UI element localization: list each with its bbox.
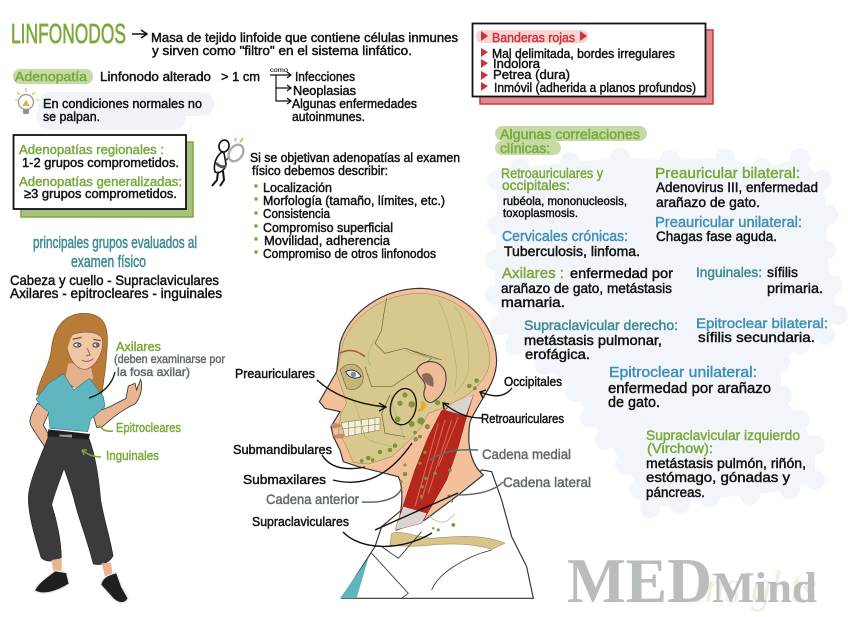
woman's labels: axillary: [89, 339, 225, 398]
red flags list: Mal delimitada, bordes irregulares: [492, 46, 675, 61]
text: bilateral epitrochlear: sífilis secundaria.: [698, 329, 815, 345]
eyes, nose and mouth: [73, 337, 101, 341]
front hair: [63, 320, 106, 357]
skin head and neck: [319, 288, 497, 530]
teal shirt strip: [340, 558, 368, 598]
head labels and pointers: [233, 366, 591, 546]
belt: [47, 429, 90, 442]
causes list: Infecciones: [295, 69, 355, 84]
heading: main groups: examen físico: [71, 252, 146, 271]
generalized heading and text: [19, 174, 182, 201]
checklist: exam items: Morfología (tamaño, límites, etc.): [263, 193, 445, 208]
text: unilateral epitrochlear: de gato.: [608, 394, 660, 411]
text: axillary: [501, 265, 673, 310]
sternocleidomastoid muscle: [395, 395, 473, 530]
definition text: [151, 30, 459, 58]
text: unilateral epitrochlear: Epitroclear unilateral:: [609, 364, 757, 381]
watermark logo: MED: [567, 546, 712, 616]
checklist: exam items: Consistencia: [263, 206, 331, 221]
text: inguinal: primaria.: [767, 280, 823, 296]
watermark logo: [567, 546, 817, 616]
panel: clinical correlations background: [485, 148, 848, 518]
causes list: Neoplasias: [293, 83, 356, 98]
intro: exam description: [250, 150, 460, 178]
woman's labels: axillary: la fosa axilar): [117, 365, 190, 379]
eye socket and eye: [340, 364, 363, 390]
preauricular label: Preauriculares: [235, 366, 315, 381]
text: axillary: mamaria.: [501, 294, 565, 310]
illustration: woman: [28, 313, 142, 603]
woman's labels: inguinal: [82, 448, 159, 463]
text: axillary: arañazo de gato, metástasis: [501, 280, 672, 296]
red flags list: Indolora: [493, 56, 541, 71]
causes list: autoinmunes.: [292, 109, 365, 124]
checklist: exam items: Localización: [263, 180, 332, 195]
regional heading and text: Adenopatías regionales :: [19, 142, 164, 157]
text: left supraclavicular: estómago, gónadas y: [646, 469, 790, 485]
submaxillary label: Submaxilares: [243, 472, 327, 487]
adenopatia definition: > 1 cm: [221, 69, 260, 84]
woman's labels: axillary: Axilares: [116, 339, 161, 354]
groups text: Cabeza y cuello - Supraclaviculares: [10, 272, 219, 288]
medial chain label: Cadena medial: [482, 446, 571, 462]
causes list: Algunas enfermedades: [292, 96, 417, 111]
ear: [417, 362, 446, 402]
arms: [30, 403, 52, 447]
submandibular label: Submandibulares: [233, 442, 332, 457]
watermark logo: Mind: [712, 565, 817, 612]
hair back: [37, 313, 107, 395]
text: chronic cervical: [502, 228, 640, 259]
text: left supraclavicular: [646, 427, 806, 500]
woman's labels: inguinal: Inguinales: [106, 448, 159, 463]
text: inguinal: Inguinales:: [696, 264, 762, 280]
neck and face: [65, 363, 93, 390]
regional heading and text: 1-2 grupos comprometidos.: [22, 155, 179, 170]
illustration: head and neck anatomy: [319, 288, 533, 598]
checklist: exam items: Movilidad, adherencia: [264, 233, 391, 248]
callout: normal conditions: se palpan.: [43, 109, 100, 124]
lymph nodes: [360, 379, 479, 531]
text: bilateral epitrochlear: [696, 315, 828, 345]
woman's labels: axillary: (deben examinarse por: [114, 352, 225, 366]
panel: red flags: [472, 24, 713, 104]
text: axillary: Axilares :: [502, 265, 564, 282]
intro: exam description: físico debemos describir:: [252, 163, 388, 178]
skull: [337, 293, 490, 464]
pointer lines: [317, 380, 512, 546]
shirt and shoulder: [342, 470, 533, 598]
text: unilateral epitrochlear: enfermedad por arañazo: [608, 380, 771, 397]
text: retroauricular and occipital: [501, 165, 627, 220]
woman's labels: epitrochlear: Epitrocleares: [116, 420, 181, 435]
checklist: exam items: [254, 180, 445, 261]
icon: figure with magnifying glass: [212, 138, 246, 186]
generalized heading and text: ≥3 grupos comprometidos.: [24, 186, 177, 201]
text: retroauricular and occipital: occipitales:: [502, 177, 570, 193]
heading: main groups: [33, 233, 197, 271]
regional heading and text: [19, 142, 179, 170]
adenopatia definition: [100, 69, 260, 84]
text: unilateral preauricular: Chagas fase aguda.: [656, 228, 777, 244]
text: right supraclavicular: metástasis pulmonar,: [524, 332, 662, 348]
definition text: Masa de tejido linfoide que contiene células inmunes: [151, 30, 459, 45]
adenopatia definition: Linfonodo alterado: [100, 69, 211, 84]
text: bilateral epitrochlear: Epitroclear bilateral:: [696, 315, 828, 331]
red flags list: [481, 46, 696, 95]
text: left supraclavicular: páncreas.: [646, 484, 705, 500]
text: inguinal: [696, 264, 823, 296]
generalized heading and text: Adenopatías generalizadas:: [19, 174, 182, 189]
occipital label: Occipitales: [504, 374, 562, 389]
ankles and shoes: [52, 558, 113, 577]
text: right supraclavicular: erofágica.: [525, 346, 590, 362]
clavicle: [390, 532, 505, 549]
arrow: title to definition: [132, 30, 147, 38]
heading: clinical correlations: Algunas correlaciones: [500, 126, 640, 142]
adenopatia label: Adenopatía: [15, 69, 88, 84]
text: axillary: enfermedad por: [570, 265, 673, 281]
text: right supraclavicular: Supraclavicular derecho:: [524, 317, 678, 333]
text: bilateral preauricular: Preauricular bilateral:: [655, 165, 800, 182]
lips and teeth: [331, 423, 345, 438]
text: bilateral preauricular: [655, 165, 818, 210]
text: retroauricular and occipital: Retroauriculares y: [501, 165, 603, 181]
checklist: exam items: Compromiso de otros linfonodos: [263, 246, 436, 261]
earring: [418, 402, 425, 411]
branching arrows: causes: como: [270, 68, 289, 74]
groups text: Axilares - epitrocleares - inguinales: [10, 285, 222, 301]
text: unilateral preauricular: [655, 214, 802, 244]
red flags heading: Banderas rojas: [492, 30, 575, 45]
watermark logo: Insights: [691, 561, 817, 612]
anterior chain label: Cadena anterior: [266, 491, 359, 507]
text: unilateral epitrochlear: [608, 364, 771, 411]
text: chronic cervical: Tuberculosis, linfoma.: [504, 243, 640, 259]
groups text: [10, 272, 222, 301]
heading: clinical correlations: [495, 126, 647, 156]
lateral chain label: Cadena lateral: [503, 474, 591, 490]
callout: normal conditions: [36, 92, 214, 130]
text: bilateral preauricular: arañazo de gato.: [656, 194, 760, 210]
callout: normal conditions: En condiciones normales no: [43, 96, 202, 111]
lymph vessels: [352, 300, 469, 522]
title: LINFONODOS: [11, 18, 126, 49]
red flags list: Petrea (dura): [493, 67, 570, 82]
text: retroauricular and occipital: toxoplasmosis.: [503, 206, 578, 220]
branching arrows: causes: [270, 68, 291, 104]
panel: regional vs generalized: [14, 135, 193, 217]
skull sutures: [365, 298, 442, 437]
preauricular circle: [387, 386, 420, 427]
shirt: [36, 374, 105, 432]
text: bilateral preauricular: Adenovirus III, enfermedad: [656, 179, 818, 195]
heading: clinical correlations: clínicas:: [500, 140, 550, 156]
icon: light bulb: [15, 88, 39, 114]
heading: main groups: principales grupos evaluados al: [33, 233, 197, 252]
retroauricular label: Retroauriculares: [481, 411, 564, 426]
text: inguinal: sífilis: [767, 264, 798, 280]
definition text: y sirven como "filtro" en el sistema linfático.: [152, 43, 412, 58]
shirt collar lines: [372, 532, 492, 598]
causes list: [292, 69, 417, 124]
text: chronic cervical: Cervicales crónicas:: [502, 228, 628, 245]
text: left supraclavicular: metástasis pulmón, riñón,: [646, 455, 806, 471]
text: left supraclavicular: (Virchow):: [647, 440, 713, 456]
text: unilateral preauricular: Preauricular unilateral:: [655, 214, 802, 231]
supraclavicular label: Supraclaviculares: [252, 514, 349, 529]
pants: [28, 436, 113, 565]
text: right supraclavicular: [524, 317, 678, 362]
text: left supraclavicular: Supraclavicular izquierdo: [646, 427, 800, 443]
red flags list: Inmóvil (adherida a planos profundos): [494, 80, 696, 95]
text: retroauricular and occipital: rubéola, mononucleosis,: [503, 194, 627, 208]
intro: exam description: Si se objetivan adenopatías al examen: [250, 150, 460, 165]
checklist: exam items: Compromiso superficial: [263, 220, 393, 235]
